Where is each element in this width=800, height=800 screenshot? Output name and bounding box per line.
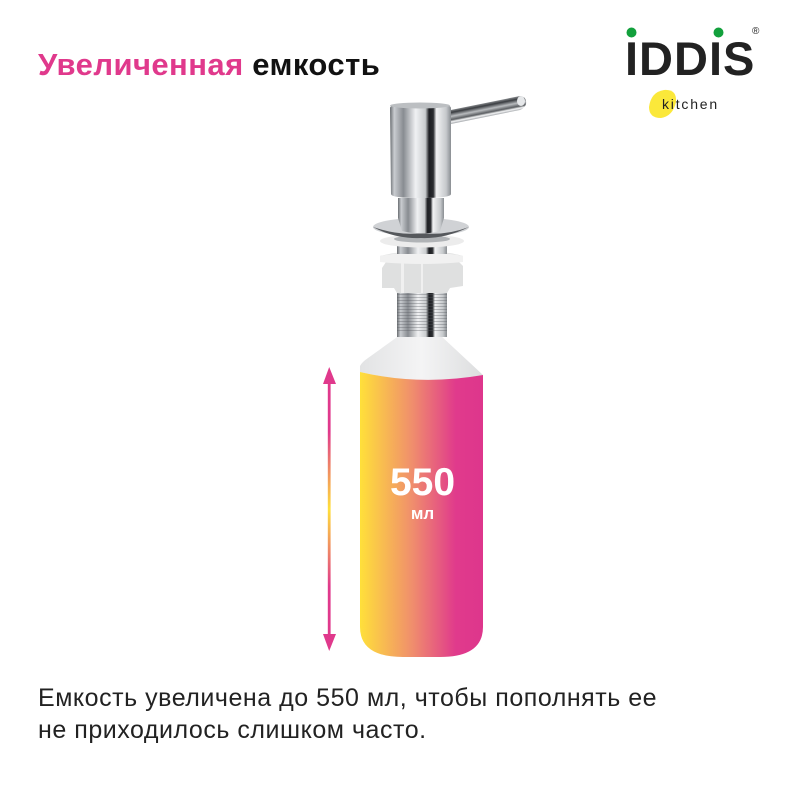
short thread above nut xyxy=(397,245,447,254)
logo dots xyxy=(626,28,724,38)
pump head xyxy=(390,102,451,198)
neck xyxy=(398,198,444,234)
logo kitchen blob xyxy=(649,90,676,118)
description text xyxy=(38,684,657,744)
bottle cap cone xyxy=(360,335,483,380)
bottle body gradient xyxy=(360,372,483,657)
description text: Емкость увеличена до 550 мл, чтобы пополнять ее xyxy=(38,684,657,712)
volume unit: мл xyxy=(411,504,434,523)
description text: не приходилось слишком часто. xyxy=(38,716,427,744)
logo kitchen text: kitchen xyxy=(662,96,719,112)
thread xyxy=(397,293,447,337)
white nut xyxy=(380,251,463,293)
washer xyxy=(380,234,464,248)
lever xyxy=(436,96,526,125)
logo registered mark: ® xyxy=(752,26,759,37)
title: Увеличенная емкость xyxy=(38,47,380,82)
logo wordmark: IDDIS xyxy=(625,32,755,85)
volume value: 550 xyxy=(390,461,455,504)
flange xyxy=(373,218,469,238)
double arrow xyxy=(323,367,336,651)
